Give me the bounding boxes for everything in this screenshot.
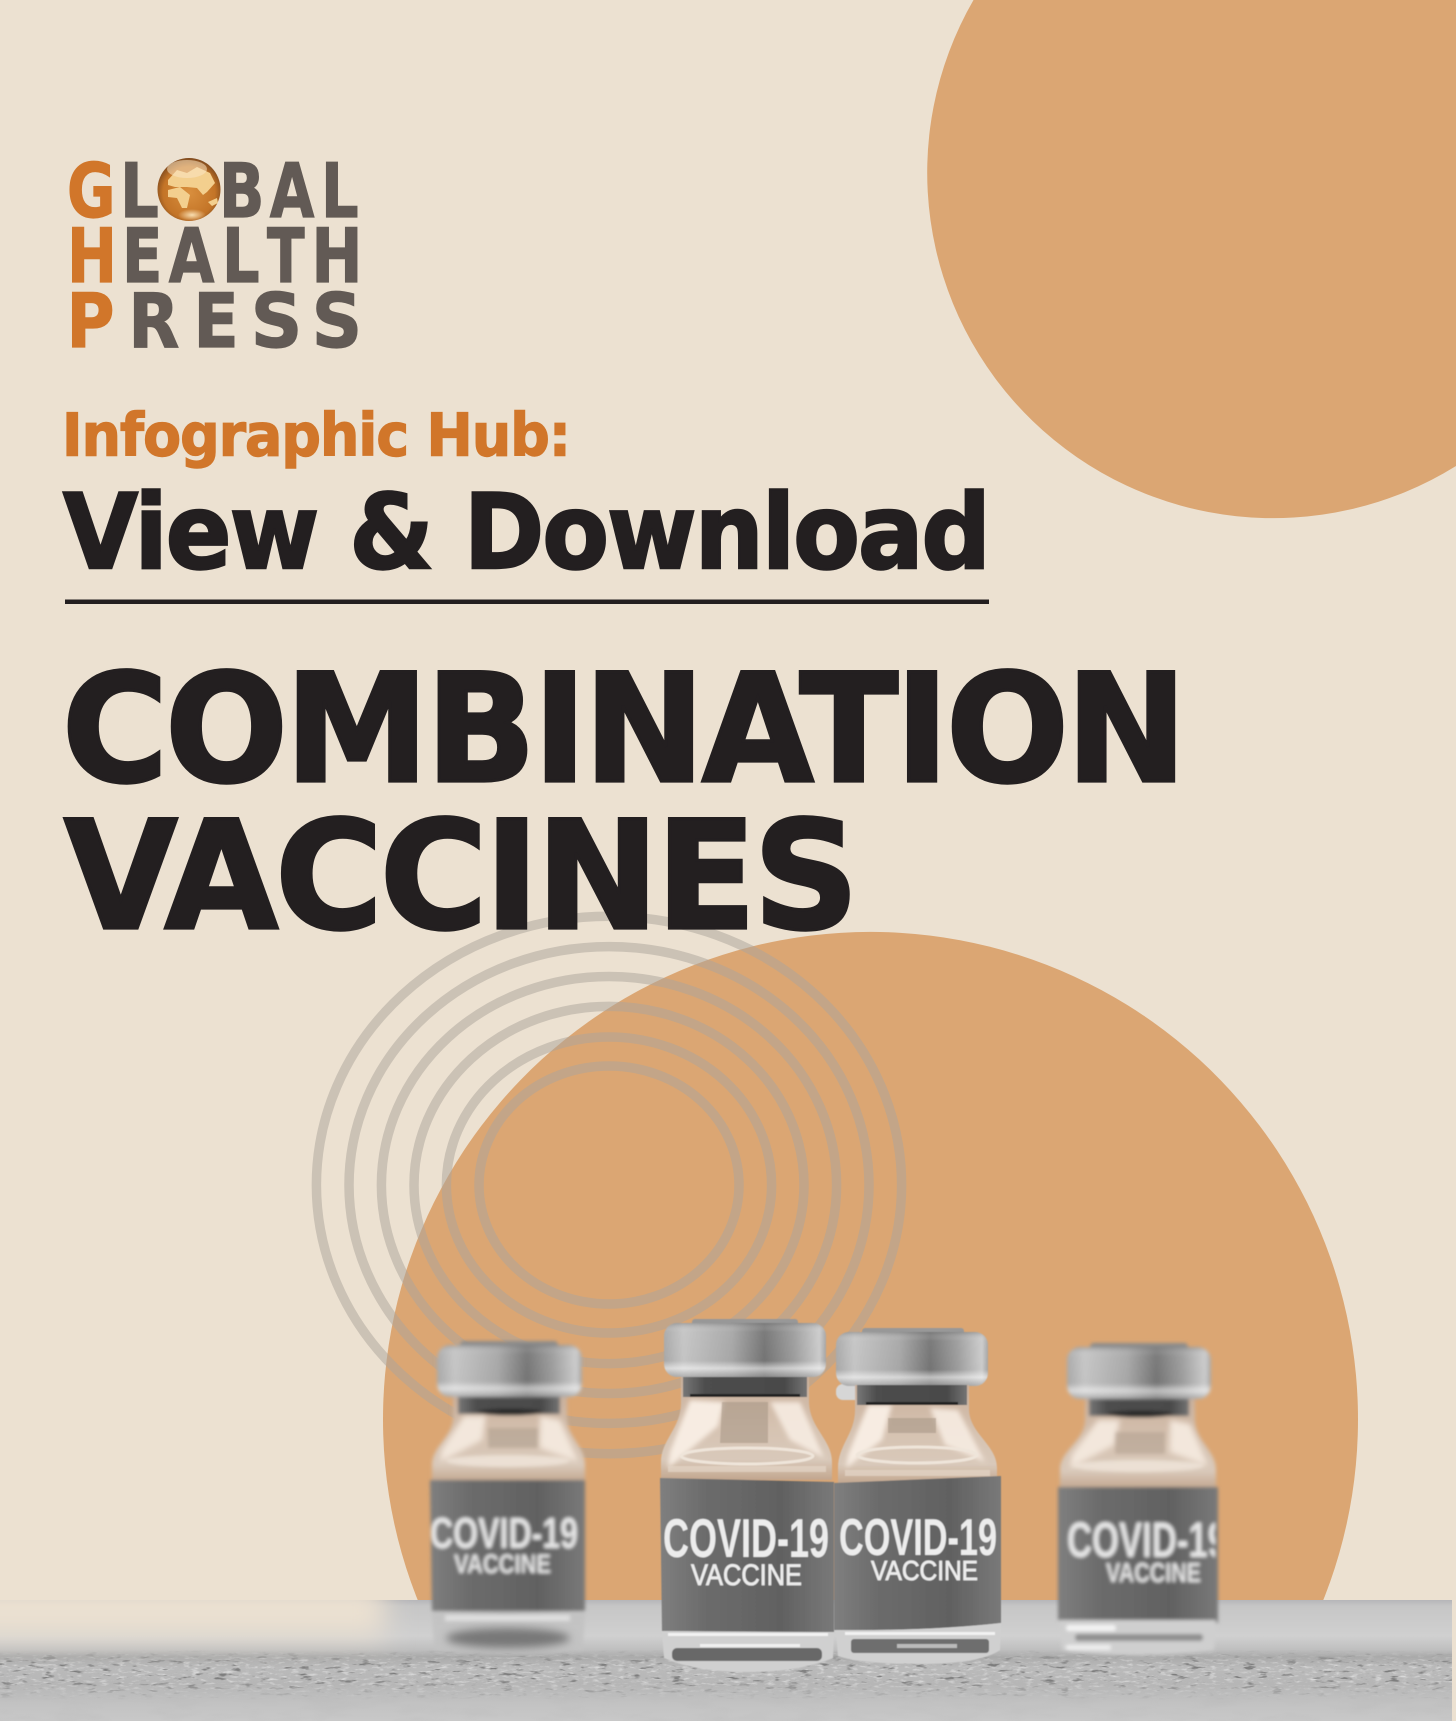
logo: Global Health Press: H	[311, 212, 363, 300]
logo: Global Health Press: A	[169, 212, 214, 300]
base	[432, 1611, 585, 1654]
neck	[458, 1397, 560, 1416]
logo: Global Health Press: E	[193, 277, 239, 365]
label text	[839, 1509, 997, 1586]
logo: Global Health Press: G	[67, 147, 116, 235]
cap	[437, 1341, 582, 1397]
logo: Global Health Press: L	[120, 147, 159, 235]
logo: Global Health Press: A	[270, 147, 314, 235]
vial 3 (centre right)	[834, 1328, 1001, 1664]
label	[430, 1480, 585, 1614]
icon: globe	[158, 158, 220, 221]
logo: Global Health Press: R	[128, 277, 179, 365]
title	[62, 643, 1184, 964]
label	[660, 1478, 834, 1632]
decorative circle: top right	[927, 0, 1456, 518]
neck	[857, 1385, 967, 1405]
logo: Global Health Press: E	[122, 212, 162, 300]
label text: COVID-19	[663, 1507, 829, 1569]
glass shoulder	[432, 1397, 585, 1482]
logo: Global Health Press: H	[67, 212, 117, 300]
base	[662, 1631, 834, 1672]
logo: Global Health Press	[66, 147, 363, 365]
label	[1058, 1487, 1218, 1624]
logo: Global Health Press: S	[312, 277, 362, 365]
subtitle: View & Download	[63, 473, 989, 593]
logo: Global Health Press: L	[321, 147, 359, 235]
label text: VACCINE	[454, 1549, 551, 1579]
logo: Global Health Press: P	[66, 277, 114, 365]
label text	[428, 1514, 580, 1576]
label text	[1066, 1519, 1218, 1585]
label text: VACCINE	[1106, 1557, 1201, 1588]
neck	[683, 1377, 807, 1397]
title: COMBINATION	[62, 643, 1184, 817]
vial 2 (centre left)	[660, 1319, 834, 1672]
label text: VACCINE	[691, 1559, 802, 1592]
hub label: Infographic Hub:	[62, 400, 570, 470]
glass shoulder	[661, 1377, 832, 1480]
cap	[664, 1319, 826, 1377]
logo: Global Health Press: B	[219, 147, 264, 235]
glass shoulder	[838, 1385, 997, 1484]
label text: VACCINE	[871, 1555, 978, 1586]
logo: Global Health Press: T	[267, 212, 305, 300]
cap	[1067, 1343, 1211, 1399]
label text	[663, 1507, 829, 1592]
glass shoulder	[1060, 1399, 1216, 1489]
logo: Global Health Press: L	[222, 212, 260, 300]
label text: COVID-19	[1067, 1512, 1227, 1568]
concentric rings	[316, 916, 902, 1454]
label text: COVID-19	[430, 1509, 578, 1558]
vial 1 (left, blurred)	[430, 1341, 585, 1654]
decorative circle: bottom	[383, 932, 1358, 1610]
base	[1060, 1620, 1216, 1655]
divider rule	[65, 600, 989, 604]
cap	[836, 1328, 988, 1400]
label	[834, 1476, 1001, 1630]
table surface	[0, 1600, 1452, 1721]
vial 4 (right, blurred)	[1058, 1343, 1227, 1655]
title: VACCINES	[64, 790, 856, 964]
base	[836, 1623, 1001, 1664]
neck	[1089, 1399, 1189, 1418]
label text: COVID-19	[839, 1509, 997, 1567]
logo: Global Health Press: S	[251, 277, 302, 365]
